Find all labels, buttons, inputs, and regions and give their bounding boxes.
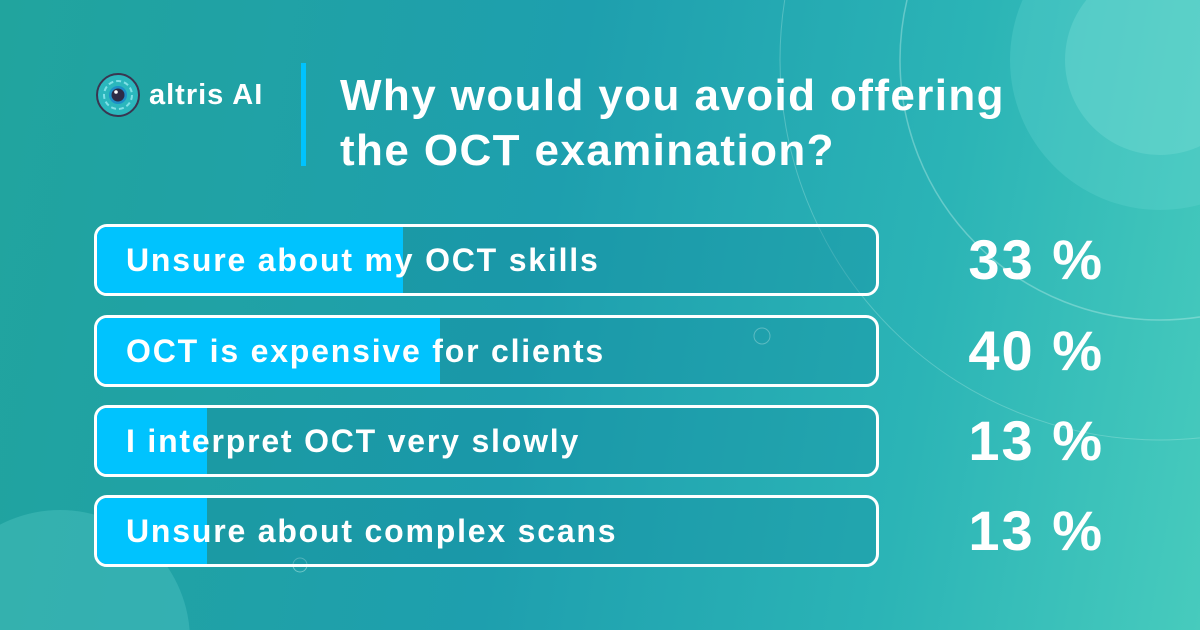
bar: complex: Unsure about complex scans [126,513,617,549]
value: 13: 13 % [968,409,1104,472]
title: the OCT examination? [340,126,835,175]
bar: slow: I interpret OCT very slowly [126,423,580,459]
logo [96,73,263,117]
value: 13b: 13 % [968,499,1104,562]
bar: expensive: OCT is expensive for clients [126,333,605,369]
logo text: altris AI [149,79,263,111]
bar: skills: Unsure about my OCT skills [126,242,600,278]
value: 40: 40 % [968,319,1104,382]
bar: slow [94,405,879,477]
bar: skills [94,224,879,296]
bar: complex [94,495,879,567]
title [340,71,1005,175]
value: 33: 33 % [968,228,1104,291]
icon: eye lens [96,73,140,117]
divider accent [301,63,306,166]
title: Why would you avoid offering [340,71,1005,120]
bar: expensive [94,315,879,387]
